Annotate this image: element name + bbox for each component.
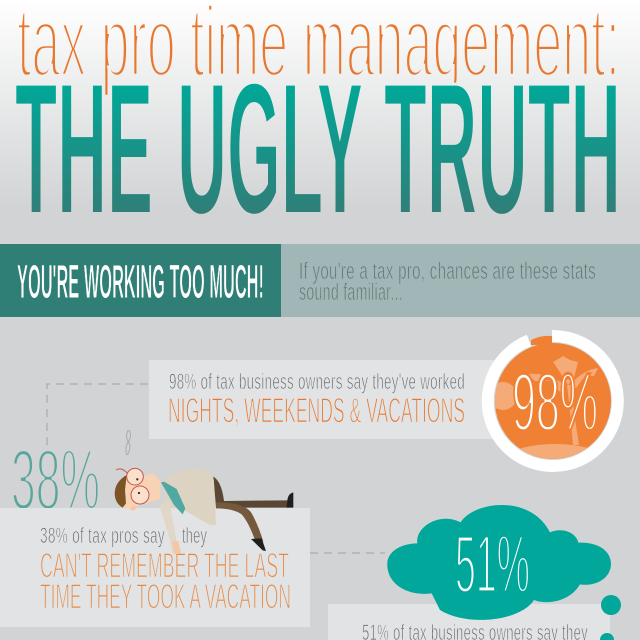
- panel: 98 percent stat: [149, 360, 494, 439]
- icon: teal thought cloud: 51%: [455, 519, 530, 610]
- banner subtext: [299, 258, 596, 306]
- connector: dashed line from 98% panel to 38%: [47, 384, 148, 450]
- banner subtext: sound familiar...: [299, 279, 403, 306]
- tie: [161, 482, 185, 514]
- panel: 38 percent stat: TIME THEY TOOK A VACATION: [40, 578, 291, 617]
- shoes: [287, 492, 293, 508]
- stat highlight: [40, 547, 291, 617]
- jacket: [162, 468, 216, 525]
- illustration: exhausted man slumped on panel: [115, 430, 293, 554]
- head and hair: [115, 473, 161, 508]
- glasses: [116, 468, 149, 504]
- icon: teal thought cloud: [387, 505, 621, 640]
- title: the ugly truth: THE: [15, 44, 153, 254]
- far leg: [213, 477, 287, 508]
- near leg: [216, 502, 263, 542]
- arm and hand: [159, 502, 181, 554]
- stat number: 38%: 38%: [11, 433, 100, 528]
- stat sentence end: they: [182, 523, 207, 548]
- panel: 51 percent stat: [328, 604, 610, 640]
- panel: 38 percent stat: [0, 508, 310, 627]
- thought bubble dots: [601, 595, 621, 615]
- squiggle: [126, 430, 130, 455]
- connector: dashed line to cloud: [310, 552, 385, 554]
- stat highlight: CAN'T REMEMBER THE LAST: [40, 547, 289, 586]
- chart: 98% donut with palm icon: [488, 336, 618, 496]
- icon: palm island: [495, 356, 598, 459]
- stat sentence: 38% of tax pros say: [40, 523, 165, 548]
